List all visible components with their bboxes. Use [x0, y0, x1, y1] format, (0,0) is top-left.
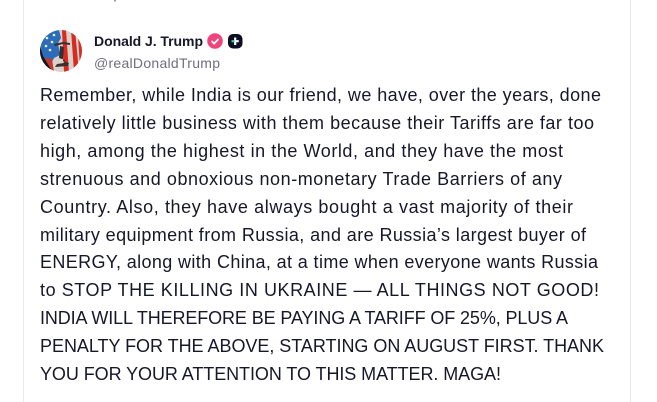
post body text: Remember, while India is our friend, we have, over the years, done	[40, 85, 601, 105]
post body text: ENERGY, along with China, at a time when everyone wants Russia	[40, 252, 599, 272]
post body text: PENALTY FOR THE ABOVE, STARTING ON AUGUST FIRST. THANK	[40, 336, 604, 356]
post body text: high, among the highest in the World, and they have the most	[40, 141, 563, 161]
avatar: flag portrait	[40, 30, 82, 72]
post body text: Country. Also, they have always bought a vast majority of their	[40, 197, 573, 217]
display name: Donald J. Trump	[94, 33, 203, 49]
handle: @realDonaldTrump	[94, 55, 220, 71]
post body text: relatively little business with them because their Tariffs are far too	[40, 113, 594, 133]
post body text: strenuous and obnoxious non-monetary Trade Barriers of any	[40, 169, 562, 189]
verified badge	[207, 33, 223, 49]
post body text: INDIA WILL THEREFORE BE PAYING A TARIFF OF 25%, PLUS A	[40, 308, 568, 328]
plus badge	[228, 34, 242, 48]
post body text	[40, 85, 604, 384]
post body text: YOU FOR YOUR ATTENTION TO THIS MATTER. MAGA!	[40, 364, 501, 384]
post body text: to STOP THE KILLING IN UKRAINE — ALL THINGS NOT GOOD!	[40, 280, 599, 300]
post body text: military equipment from Russia, and are Russia’s largest buyer of	[40, 225, 587, 245]
